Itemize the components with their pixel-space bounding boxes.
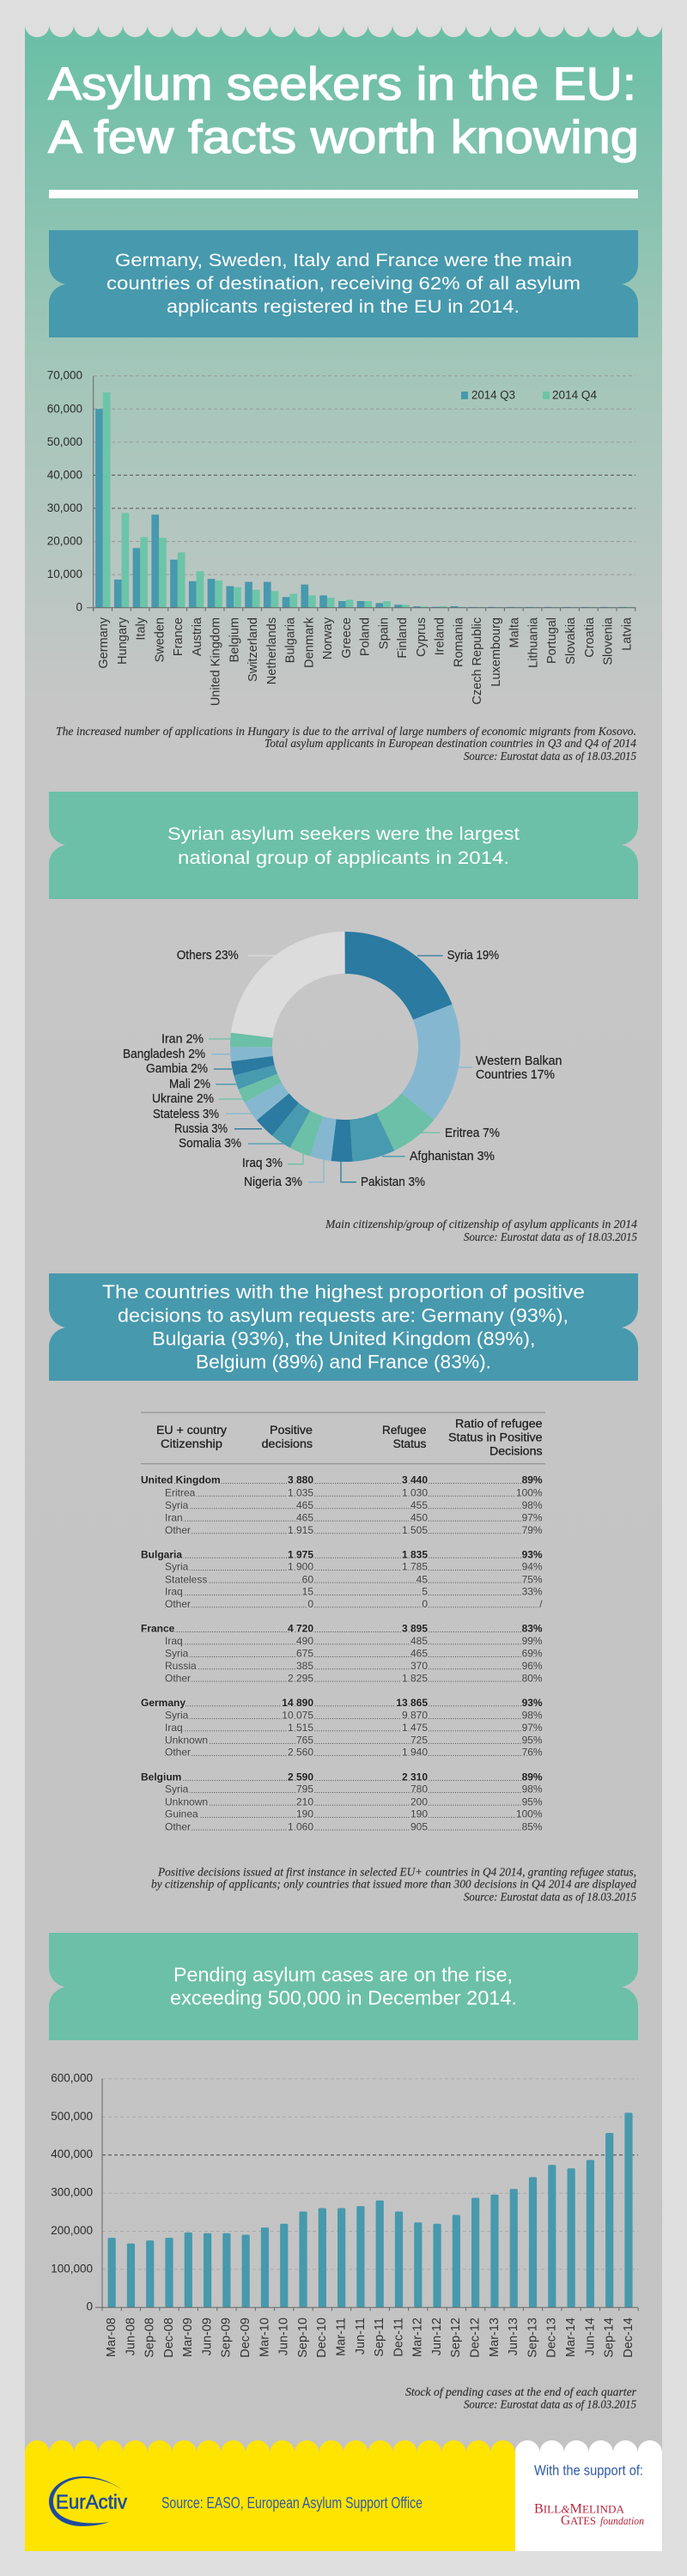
table rows: / (539, 1598, 543, 1610)
table rows: 210 (296, 1796, 313, 1808)
title: A few facts worth knowing (48, 112, 639, 163)
table rows: 455 (410, 1499, 428, 1511)
title: Asylum seekers in the EU: (48, 58, 636, 110)
table rows: 1 785 (402, 1561, 428, 1573)
bar chart: asylum applicants by country 2014 Q3 and Q4: Germany (97, 617, 111, 669)
table rows: 83% (522, 1623, 543, 1635)
bar chart: asylum applicants by country 2014 Q3 and Q4: Luxembourg (489, 617, 503, 687)
table rows: 1 035 (288, 1487, 313, 1499)
table header: Status (393, 1437, 427, 1450)
source text: Source: EASO, European Asylum Support Office (161, 2494, 423, 2512)
bar chart: pending asylum cases: 300,000 (51, 2186, 93, 2199)
bar chart: asylum applicants by country 2014 Q3 and Q4: Belgium (228, 617, 241, 662)
caption: donut source (325, 1218, 637, 1244)
table rows: 80% (522, 1672, 543, 1684)
table rows: 100% (516, 1808, 543, 1820)
table rows: Syria (165, 1499, 189, 1511)
table rows: 190 (296, 1808, 313, 1820)
bar chart: asylum applicants by country 2014 Q3 and Q4: 50,000 (47, 435, 82, 448)
bar chart: asylum applicants by country 2014 Q3 and Q4: Croatia (583, 617, 597, 658)
banner: positive decisions: Bulgaria (93%), the United Kingdom (89%), (152, 1328, 536, 1350)
table header: Ratio of refugee (455, 1418, 543, 1431)
bar chart: asylum applicants by country 2014 Q3 and Q4: France (172, 617, 185, 656)
banner: pending cases (49, 1933, 638, 2040)
icon: Gates foundation wordmark: GATES (561, 2513, 596, 2528)
bar chart: pending asylum cases: 500,000 (51, 2110, 93, 2123)
table rows: 2 310 (402, 1771, 428, 1783)
bar chart: asylum applicants by country 2014 Q3 and Q4: Czech Republic (471, 617, 484, 705)
table rows: 99% (522, 1635, 543, 1647)
table rows: 95% (522, 1796, 543, 1808)
bar chart: asylum applicants by country 2014 Q3 and Q4: 70,000 (47, 369, 82, 382)
table rows: 1 940 (402, 1747, 428, 1759)
bar chart: asylum applicants by country 2014 Q3 and Q4: Italy (135, 617, 149, 641)
table header: EU + country (156, 1424, 227, 1437)
bar chart: asylum applicants by country 2014 Q3 and Q4: Greece (340, 617, 354, 659)
bar chart: pending asylum cases: 200,000 (51, 2224, 93, 2237)
caption: table source: by citizenship of applicants; only countries that issued more than 300 decisions in Q4 2014 are displayed (151, 1878, 637, 1891)
footer: sponsor panel (515, 2440, 662, 2551)
table rows: 100% (516, 1487, 543, 1499)
bar chart: asylum applicants by country 2014 Q3 and Q4: Switzerland (246, 617, 260, 682)
icon: Gates foundation wordmark: foundation (600, 2514, 644, 2527)
table rows: Eritrea (165, 1487, 196, 1499)
table rows: 3 895 (402, 1623, 428, 1635)
table rows: 385 (296, 1660, 313, 1672)
banner: positive decisions (49, 1273, 638, 1381)
table rows: Stateless (165, 1573, 207, 1585)
table rows: 96% (522, 1660, 543, 1672)
caption: table source: Positive decisions issued at first instance in selected EU+ countries in Q4 2014, granting refugee status, (157, 1866, 636, 1879)
table rows: 795 (296, 1783, 313, 1795)
donut labels and leader lines: Countries 17% (476, 1068, 555, 1082)
table rows: Syria (165, 1710, 189, 1722)
table rows: Other (165, 1524, 191, 1536)
table rows: 1 030 (402, 1487, 428, 1499)
table rows: 45 (416, 1573, 428, 1585)
bar chart: asylum applicants by country 2014 Q3 and Q4: 0 (76, 601, 82, 614)
table rows: 97% (522, 1511, 543, 1523)
banner: Syrian asylum seekers: Syrian asylum seekers were the largest (167, 824, 520, 844)
bar chart: asylum applicants by country 2014 Q3 and Q4: Denmark (302, 617, 316, 668)
table rows: 465 (296, 1499, 313, 1511)
donut chart: citizenship of applicants (251, 953, 440, 1140)
banner: main destination countries (49, 230, 638, 337)
table rows: 1 475 (402, 1722, 428, 1734)
table rows: 190 (410, 1808, 428, 1820)
table rows: 1 825 (402, 1672, 428, 1684)
legend: quarters (461, 388, 597, 402)
caption: pending cases source (405, 2386, 637, 2412)
table: positive decisions by country (141, 1413, 545, 1832)
bar chart: asylum applicants by country 2014 Q3 and Q4: Slovenia (602, 617, 616, 665)
table rows: 490 (296, 1635, 313, 1647)
bar chart: pending asylum cases: Mar-14 (564, 2318, 578, 2357)
table rows: 1 975 (288, 1549, 313, 1561)
donut labels and leader lines: Nigeria 3% (244, 1176, 302, 1189)
table rows: Iraq (165, 1586, 183, 1598)
donut labels and leader lines: Syria 19% (447, 949, 499, 963)
banner: positive decisions: decisions to asylum requests are: Germany (93%), (118, 1305, 568, 1326)
table rows: Syria (165, 1648, 189, 1660)
bar chart: pending asylum cases: Dec-14 (622, 2318, 635, 2358)
bar chart: pending asylum cases: Mar-08 (105, 2318, 119, 2357)
bar chart: asylum applicants by country 2014 Q3 and Q4 (47, 369, 636, 706)
donut labels and leader lines: Others 23% (177, 949, 239, 963)
table rows: 675 (296, 1648, 313, 1660)
bar chart: pending asylum cases: 100,000 (51, 2262, 93, 2275)
table rows: Unknown (165, 1796, 208, 1808)
table rows: 94% (522, 1561, 543, 1573)
donut labels and leader lines: Mali 2% (169, 1078, 210, 1091)
bar chart: pending asylum cases: Dec-08 (162, 2318, 176, 2358)
caption: table source (151, 1866, 637, 1904)
bar chart: asylum applicants by country 2014 Q3 and Q4: 40,000 (47, 468, 82, 481)
table rows: 765 (296, 1735, 313, 1747)
donut labels and leader lines: Stateless 3% (153, 1108, 219, 1121)
table rows: United Kingdom (141, 1474, 221, 1486)
bar chart: pending asylum cases: Mar-11 (334, 2318, 348, 2356)
table rows: 60 (302, 1573, 313, 1585)
donut labels and leader lines: Pakistan 3% (361, 1176, 425, 1189)
bar chart: asylum applicants by country 2014 Q3 and Q4: 10,000 (47, 568, 82, 580)
footer: yellow source panel (25, 2440, 515, 2551)
table rows: 4 720 (288, 1623, 313, 1635)
table rows: 76% (522, 1747, 543, 1759)
banner: positive decisions: The countries with the highest proportion of positive (102, 1281, 585, 1303)
bar chart: asylum applicants by country 2014 Q3 and Q4: Romania (452, 617, 465, 667)
banner: pending cases: exceeding 500,000 in December 2014. (170, 1986, 517, 2008)
table rows: 10 075 (282, 1710, 313, 1722)
table rows: 780 (410, 1783, 428, 1795)
table rows: 97% (522, 1722, 543, 1734)
banner: main destination countries: countries of destination, receiving 62% of all asylum (106, 274, 581, 294)
bar chart: pending asylum cases: Jun-08 (124, 2318, 137, 2355)
donut labels and leader lines (123, 949, 562, 1189)
table rows: Other (165, 1820, 191, 1832)
bar chart: asylum applicants by country 2014 Q3 and Q4: Ireland (434, 617, 447, 655)
bar chart: pending asylum cases: Sep-11 (373, 2318, 386, 2357)
bar chart: asylum applicants by country 2014 Q3 and Q4: United Kingdom (210, 617, 223, 706)
bar chart: asylum applicants by country 2014 Q3 and Q4: Sweden (153, 617, 167, 662)
table rows: Iran (165, 1511, 183, 1523)
table header: decisions (262, 1437, 313, 1450)
caption: chart 1 source: The increased number of applications in Hungary is due to the arrival of large numbers of economic migrants from Kosovo. (56, 726, 636, 738)
donut labels and leader lines: Afghanistan 3% (410, 1150, 495, 1163)
table rows: 69% (522, 1648, 543, 1660)
table rows: 1 505 (402, 1524, 428, 1536)
title (48, 58, 639, 163)
table header (156, 1418, 543, 1458)
table rows: 0 (307, 1598, 313, 1610)
bar chart: pending asylum cases: Mar-10 (258, 2318, 271, 2357)
table rows: 93% (522, 1697, 543, 1709)
bar chart: pending asylum cases: Dec-13 (545, 2318, 559, 2358)
bar chart: asylum applicants by country 2014 Q3 and Q4: Poland (359, 617, 373, 656)
bar chart: pending asylum cases: 600,000 (51, 2071, 93, 2084)
table rows: 85% (522, 1820, 543, 1832)
banner: main destination countries: Germany, Sweden, Italy and France were the main (115, 251, 572, 270)
table rows: 14 890 (282, 1697, 313, 1709)
bar chart: pending asylum cases: Mar-13 (488, 2318, 502, 2357)
bar chart: pending asylum cases: Mar-09 (181, 2318, 195, 2357)
banner: Syrian asylum seekers: national group of applicants in 2014. (178, 848, 509, 868)
table rows: 450 (410, 1511, 428, 1523)
bar chart: pending asylum cases: 400,000 (51, 2148, 93, 2160)
caption: chart 1 source: Source: Eurostat data as of 18.03.2015 (464, 750, 636, 763)
donut labels and leader lines: Somalia 3% (179, 1137, 241, 1151)
bar chart: pending asylum cases: Jun-10 (277, 2318, 291, 2355)
table rows: 485 (410, 1635, 428, 1647)
table rows: 465 (296, 1511, 313, 1523)
table rows: 465 (410, 1648, 428, 1660)
table rows: France (141, 1623, 175, 1635)
donut labels and leader lines: Western Balkan (476, 1054, 562, 1068)
table rows: 79% (522, 1524, 543, 1536)
bar chart: pending asylum cases: Dec-10 (315, 2318, 329, 2358)
legend: quarters: 2014 Q3 (471, 388, 515, 402)
bar chart: pending asylum cases: 0 (86, 2300, 93, 2313)
footer: sponsor panel: With the support of: (534, 2463, 643, 2479)
table rows (141, 1474, 543, 1832)
table rows: 905 (410, 1820, 428, 1832)
table rows: 5 (422, 1586, 428, 1598)
table rows: 1 915 (288, 1524, 313, 1536)
bar chart: pending asylum cases: Sep-13 (526, 2318, 539, 2358)
banner: main destination countries: applicants registered in the EU in 2014. (167, 297, 520, 317)
table rows: 95% (522, 1735, 543, 1747)
table rows: Other (165, 1598, 191, 1610)
bar chart: pending asylum cases: Dec-12 (469, 2318, 483, 2358)
table rows: 89% (522, 1771, 543, 1783)
icon: Gates foundation wordmark: BILL&MELINDA (534, 2502, 625, 2517)
bar chart: pending asylum cases: Jun-09 (200, 2318, 214, 2355)
donut labels and leader lines: Iraq 3% (242, 1157, 283, 1170)
table header: Refugee (382, 1424, 426, 1437)
caption: donut source: Main citizenship/group of citizenship of asylum applicants in 2014 (325, 1218, 637, 1231)
bar chart: pending asylum cases: Jun-13 (507, 2318, 520, 2355)
table rows: 98% (522, 1783, 543, 1795)
icon: EurActiv logo: EurActiv (56, 2491, 127, 2513)
table rows: 2 295 (288, 1672, 313, 1684)
bar chart: asylum applicants by country 2014 Q3 and Q4: Austria (191, 617, 204, 656)
bar chart: pending asylum cases: Jun-14 (583, 2318, 597, 2355)
bar chart: pending asylum cases: Dec-11 (392, 2318, 405, 2357)
table rows: Unknown (165, 1735, 208, 1747)
bar chart: asylum applicants by country 2014 Q3 and Q4: Lithuania (526, 617, 540, 668)
table rows: Iraq (165, 1635, 183, 1647)
caption: table source: Source: Eurostat data as of 18.03.2015 (464, 1891, 636, 1904)
banner: positive decisions: Belgium (89%) and France (83%). (196, 1352, 491, 1373)
bar chart: pending asylum cases (51, 2071, 639, 2358)
bar chart: pending asylum cases: Mar-12 (411, 2318, 425, 2357)
banner: Syrian asylum seekers (49, 792, 638, 899)
table rows: 9 870 (402, 1710, 428, 1722)
bar chart: asylum applicants by country 2014 Q3 and Q4: 20,000 (47, 535, 82, 548)
table rows: 98% (522, 1710, 543, 1722)
bar chart: pending asylum cases: Sep-10 (296, 2318, 310, 2358)
caption: chart 1 source: Total asylum applicants in European destination countries in Q3 and Q4 of 2014 (264, 738, 636, 750)
table rows: 93% (522, 1549, 543, 1561)
table rows: 1 835 (402, 1549, 428, 1561)
bar chart: pending asylum cases: Sep-09 (220, 2318, 234, 2358)
bar chart: asylum applicants by country 2014 Q3 and Q4: Bulgaria (284, 617, 298, 663)
donut labels and leader lines: Russia 3% (174, 1122, 228, 1136)
donut labels and leader lines: Eritrea 7% (445, 1127, 500, 1140)
table rows: Other (165, 1672, 191, 1684)
table header: Positive (270, 1424, 313, 1437)
bar chart: asylum applicants by country 2014 Q3 and Q4: Slovakia (564, 617, 578, 665)
legend: quarters: 2014 Q4 (552, 388, 597, 402)
table rows: 1 060 (288, 1820, 313, 1832)
donut labels and leader lines: Gambia 2% (146, 1062, 208, 1076)
bar chart: asylum applicants by country 2014 Q3 and Q4: Finland (396, 617, 410, 659)
table rows: 200 (410, 1796, 428, 1808)
bar chart: pending asylum cases: Sep-12 (449, 2318, 463, 2358)
icon: Gates foundation wordmark (534, 2502, 644, 2528)
table rows: 1 900 (288, 1561, 313, 1573)
table header: Citizenship (161, 1437, 222, 1450)
table rows: Belgium (141, 1771, 181, 1783)
table rows: Syria (165, 1561, 189, 1573)
table rows: 0 (422, 1598, 428, 1610)
bar chart: pending asylum cases: Dec-09 (239, 2318, 252, 2358)
table rows: Guinea (165, 1808, 198, 1820)
table header: Decisions (489, 1445, 543, 1458)
title underline bar (49, 190, 638, 198)
bar chart: asylum applicants by country 2014 Q3 and Q4: Latvia (620, 617, 634, 651)
table rows: Syria (165, 1783, 189, 1795)
table rows: Other (165, 1747, 191, 1759)
table rows: Germany (141, 1697, 185, 1709)
table rows: Russia (165, 1660, 197, 1672)
donut labels and leader lines: Iran 2% (161, 1033, 204, 1047)
table rows: 2 560 (288, 1747, 313, 1759)
bar chart: asylum applicants by country 2014 Q3 and Q4: 30,000 (47, 501, 82, 514)
bar chart: pending asylum cases: Sep-14 (603, 2318, 617, 2358)
bar chart: pending asylum cases: Jun-11 (354, 2318, 368, 2354)
donut labels and leader lines: Ukraine 2% (152, 1092, 214, 1106)
table rows: 370 (410, 1660, 428, 1672)
table rows: 75% (522, 1573, 543, 1585)
bar chart: pending asylum cases: Jun-12 (430, 2318, 444, 2355)
bar chart: asylum applicants by country 2014 Q3 and Q4: Malta (508, 617, 522, 647)
table rows: 15 (302, 1586, 313, 1598)
icon: EurActiv logo (49, 2476, 127, 2526)
caption: donut source: Source: Eurostat data as of 18.03.2015 (464, 1231, 637, 1244)
bar chart: pending asylum cases: Sep-08 (143, 2318, 157, 2358)
table rows: 1 515 (288, 1722, 313, 1734)
bar chart: asylum applicants by country 2014 Q3 and Q4: 60,000 (47, 402, 82, 415)
bar chart: asylum applicants by country 2014 Q3 and Q4: Netherlands (265, 617, 279, 684)
table rows: 3 440 (402, 1474, 428, 1486)
banner: pending cases: Pending asylum cases are on the rise, (173, 1964, 513, 1986)
table rows: 725 (410, 1735, 428, 1747)
table header: Status in Positive (448, 1431, 543, 1444)
bar chart: asylum applicants by country 2014 Q3 and Q4: Portugal (545, 617, 559, 664)
table rows: 98% (522, 1499, 543, 1511)
table rows: 13 865 (396, 1697, 428, 1709)
table rows: Bulgaria (141, 1549, 182, 1561)
table rows: 3 880 (288, 1474, 313, 1486)
table rows: Iraq (165, 1722, 183, 1734)
caption: chart 1 source (56, 726, 636, 763)
caption: pending cases source: Source: Eurostat data as of 18.03.2015 (464, 2399, 636, 2412)
caption: pending cases source: Stock of pending cases at the end of each quarter (405, 2386, 637, 2399)
donut labels and leader lines: Bangladesh 2% (123, 1048, 205, 1061)
bar chart: asylum applicants by country 2014 Q3 and Q4: Hungary (116, 617, 130, 665)
bar chart: asylum applicants by country 2014 Q3 and Q4: Spain (377, 617, 391, 649)
table rows: 2 590 (288, 1771, 313, 1783)
bar chart: asylum applicants by country 2014 Q3 and Q4: Norway (321, 617, 335, 659)
table rows: 89% (522, 1474, 543, 1486)
table rows: 33% (522, 1586, 543, 1598)
bar chart: asylum applicants by country 2014 Q3 and Q4: Cyprus (415, 617, 429, 657)
